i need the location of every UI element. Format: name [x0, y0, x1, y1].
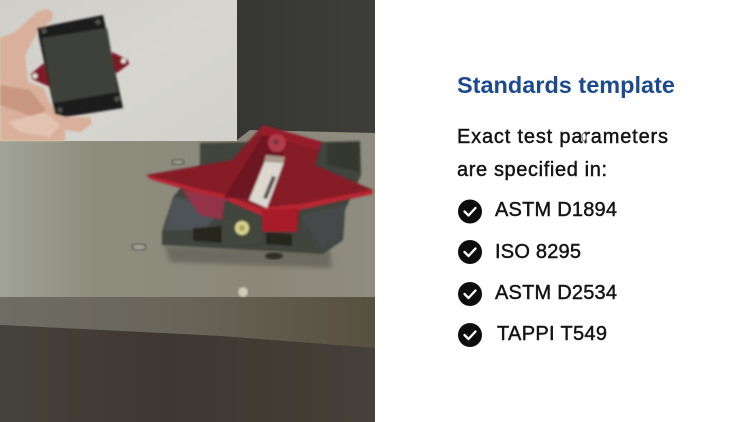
heading: Standards template [457, 72, 675, 98]
list item: ASTM D1894: ASTM D1894 [495, 199, 617, 221]
lower cabinet [0, 325, 375, 422]
base bolts [265, 252, 283, 260]
white film specimen [249, 161, 284, 208]
fixture dark base [162, 141, 361, 254]
table front edge [0, 297, 375, 348]
list item: ISO 8295 [458, 240, 581, 264]
mouse cursor [582, 133, 586, 141]
list item: ASTM D1894 [458, 199, 617, 224]
table screw rear [172, 159, 184, 165]
red plate ear right [110, 52, 129, 73]
table reflection spot [238, 287, 248, 297]
center clamp block with brass screw [222, 216, 262, 246]
hand [0, 9, 92, 141]
table screw left [132, 244, 146, 250]
black holder frame [37, 15, 123, 117]
fixture shadow [165, 246, 332, 268]
inset photo: hand holding sample holder [0, 0, 237, 141]
intro text block: Exact test parameters [457, 126, 668, 148]
list item: ASTM D2534: ASTM D2534 [495, 282, 617, 304]
grey holder window [42, 28, 118, 103]
holder screws [42, 28, 46, 34]
red knob [268, 134, 286, 152]
list item: ISO 8295: ISO 8295 [495, 241, 581, 263]
table surface [0, 130, 375, 297]
red specimen plate [146, 125, 373, 232]
red plate ear left [31, 63, 50, 87]
intro text block: are specified in: [457, 159, 607, 181]
inset background [0, 0, 237, 141]
list item: TAPPI T549 [458, 323, 607, 347]
list: standards [458, 199, 617, 347]
panel: video photo of test fixture [0, 0, 375, 422]
frame slot [224, 135, 289, 198]
list item: TAPPI T549: TAPPI T549 [497, 323, 607, 345]
intro text block [457, 126, 668, 181]
